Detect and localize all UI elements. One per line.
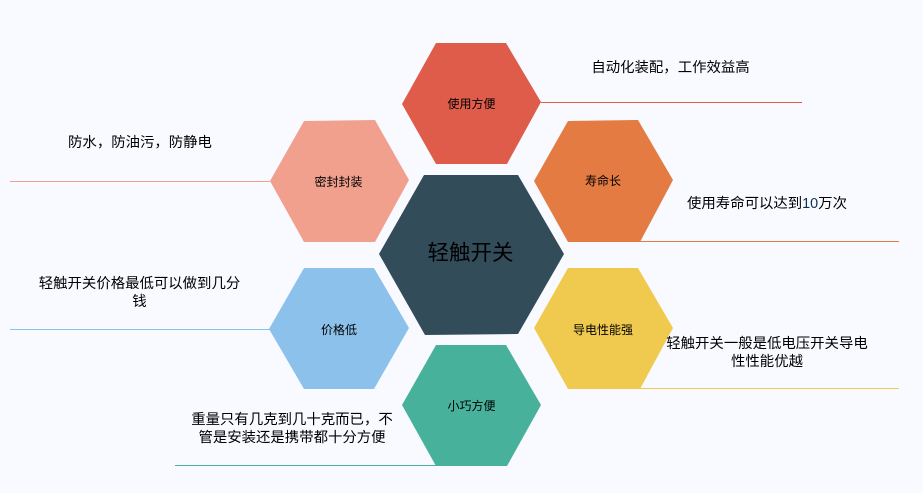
feature: 使用方便 <box>402 43 802 164</box>
feature: 价格低: 价格低 <box>321 322 357 337</box>
feature: 导电性能强 <box>534 268 899 389</box>
feature: 价格低 <box>10 268 409 389</box>
feature: 小巧方便 <box>175 345 541 466</box>
centre hexagon: 轻触开关: 轻触开关 <box>427 241 514 265</box>
feature: 寿命长 <box>534 120 899 242</box>
centre hexagon: 轻触开关 <box>379 175 564 335</box>
feature: 密封封装: 密封封装 <box>314 174 363 189</box>
feature: 小巧方便: 管是安装还是携带都十分方便 <box>198 429 386 446</box>
feature: 寿命长: 使用寿命可以达到10万次 <box>687 194 847 212</box>
feature: 密封封装: 防水，防油污，防静电 <box>68 134 212 151</box>
feature: 导电性能强: 性性能优越 <box>731 353 803 370</box>
feature: 导电性能强: 轻触开关一般是低电压开关导电 <box>666 335 868 352</box>
feature: 小巧方便: 小巧方便 <box>447 398 496 413</box>
feature: 密封封装 <box>10 120 409 242</box>
feature: 价格低: 钱 <box>132 293 147 310</box>
feature: 导电性能强: 导电性能强 <box>573 323 633 337</box>
feature: 寿命长: 寿命长 <box>585 173 621 188</box>
feature: 价格低: 轻触开关价格最低可以做到几分 <box>39 275 240 292</box>
feature: 使用方便: 自动化装配，工作效益高 <box>591 59 750 76</box>
feature: 小巧方便: 重量只有几克到几十克而已，不 <box>191 411 393 428</box>
feature: 使用方便: 使用方便 <box>447 96 496 111</box>
